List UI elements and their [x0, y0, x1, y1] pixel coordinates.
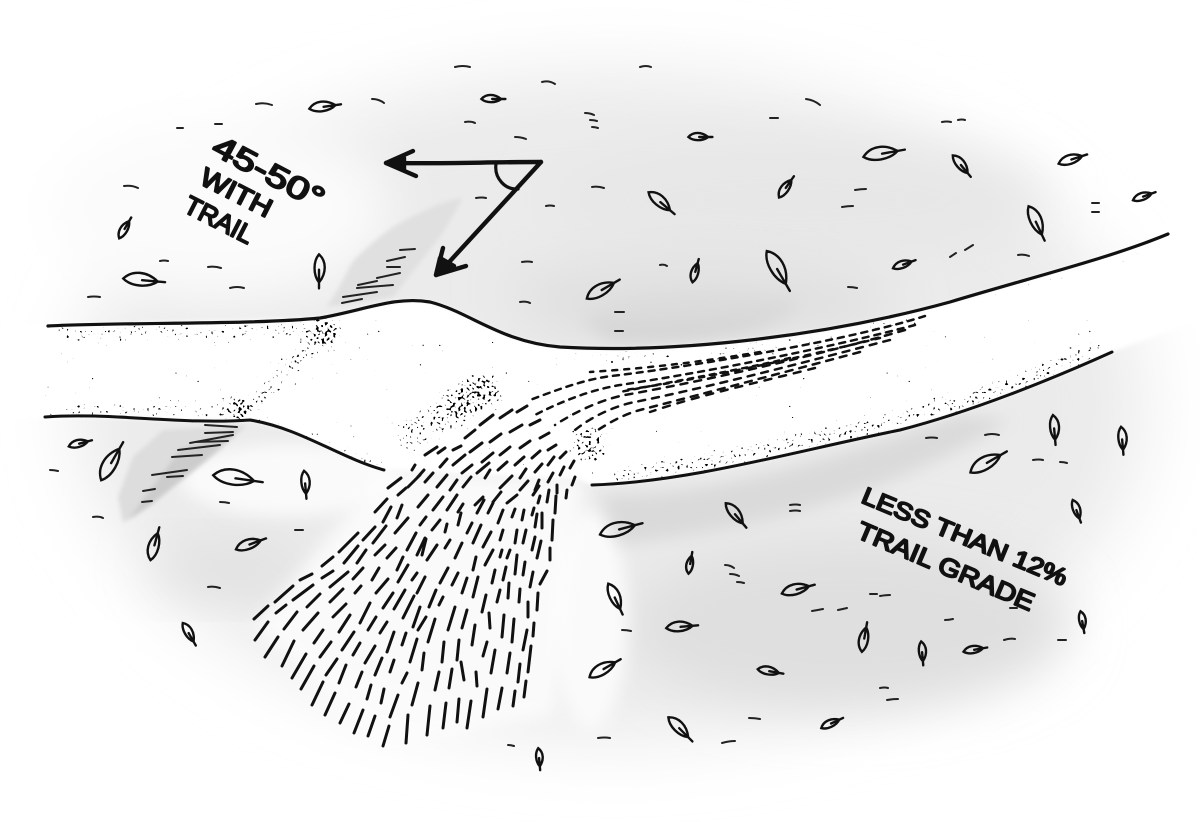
grey vignette background [50, 70, 1145, 740]
label: less than 12% trail grade: LESS THAN 12% [858, 483, 1071, 592]
drain dashes: upper section along the trail [530, 316, 925, 430]
label: 45-50 degrees with trail: WITH [195, 162, 278, 223]
small ground ticks [50, 66, 1099, 746]
lower trail edge left [45, 416, 384, 470]
label: less than 12% trail grade [853, 483, 1071, 617]
trail band [0, 225, 1200, 485]
angle arrows [386, 151, 541, 275]
label: 45-50 degrees with trail [179, 128, 331, 250]
label: less than 12% trail grade: TRAIL GRADE [853, 517, 1038, 617]
label: 45-50 degrees with trail: TRAIL [179, 190, 259, 250]
ink washes [118, 198, 1010, 545]
water bar hatch, upper [342, 249, 415, 303]
water bar hatch, lower [142, 425, 237, 502]
drain fan ground [255, 470, 585, 750]
drain dashes: lower fan [254, 406, 575, 746]
label: 45-50 degrees with trail: 45-50° [207, 128, 331, 216]
leaves scattered over the forest floor [68, 95, 1157, 770]
lower trail edge right [592, 352, 1112, 485]
stippling along trail edges and drain [45, 242, 1151, 480]
upper trail edge [48, 234, 1168, 348]
